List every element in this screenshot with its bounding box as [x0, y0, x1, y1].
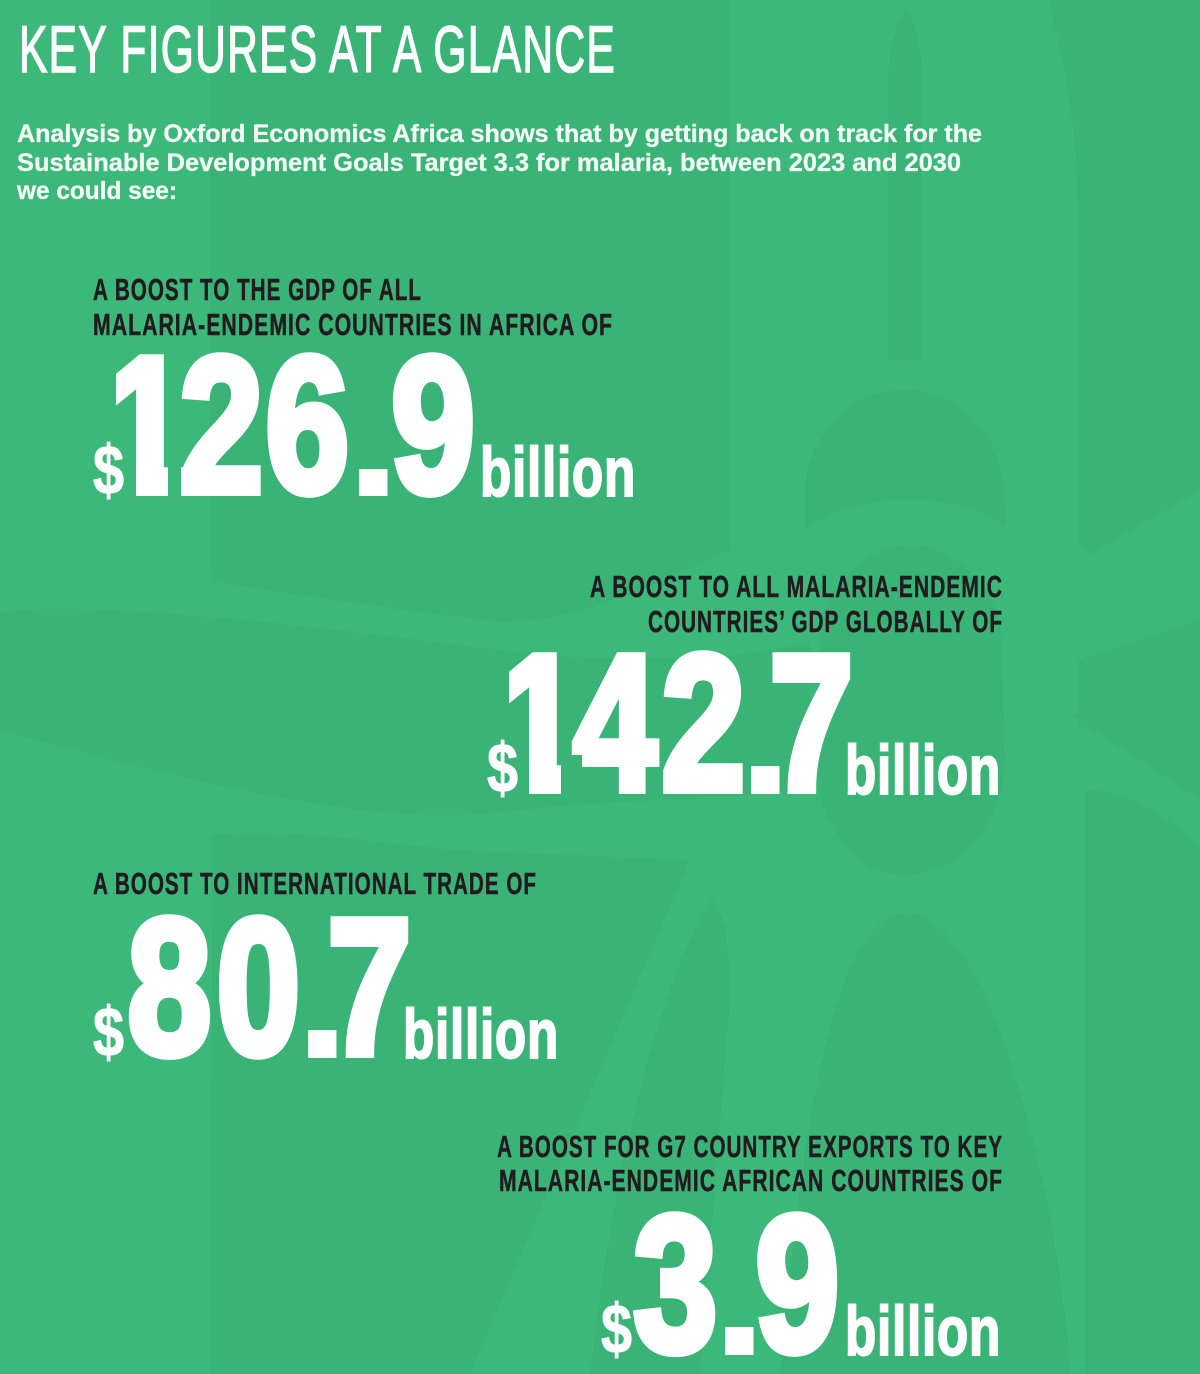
intro text: Analysis by Oxford Economics Africa shows that by getting back on track for the [17, 120, 982, 148]
intro text: Sustainable Development Goals Target 3.3 for malaria, between 2023 and 2030 [17, 149, 961, 177]
label: trade boost: A BOOST TO INTERNATIONAL TRADE OF [93, 866, 537, 901]
figure: $3.9 billion: $ [601, 1290, 632, 1368]
figure: $142.7 billion: billion [845, 731, 1001, 809]
figure: $126.9 billion: $ [93, 431, 124, 509]
figure: $80.7 billion [93, 914, 556, 1062]
figure: $126.9 billion [93, 352, 633, 500]
figure: $126.9 billion: billion [480, 433, 636, 511]
label: global GDP boost: A BOOST TO ALL MALARIA-ENDEMIC [590, 569, 1003, 604]
label: global GDP boost: COUNTRIES’ GDP GLOBALLY OF [648, 604, 1003, 639]
label: Africa GDP boost: A BOOST TO THE GDP OF ALL [93, 272, 422, 307]
label: Africa GDP boost: MALARIA-ENDEMIC COUNTRIES IN AFRICA OF [93, 307, 613, 342]
label: Africa GDP boost [93, 272, 613, 342]
panel: GDP of malaria-endemic countries in Africa [93, 278, 633, 500]
figure: $142.7 billion [487, 650, 998, 798]
title: KEY FIGURES AT A GLANCE [19, 12, 616, 86]
figure: $80.7 billion: billion [403, 995, 559, 1073]
label: G7 export boost [497, 1129, 1003, 1198]
intro text [16, 120, 982, 205]
intro text: we could see: [16, 177, 177, 205]
panel: G7 exports [497, 1129, 1003, 1374]
panel: global GDP of malaria-endemic countries [487, 576, 1002, 798]
panel: international trade [93, 872, 556, 1062]
figure: $126.9 billion: 126.9 [105, 316, 475, 533]
figure: $142.7 billion: $ [487, 729, 518, 807]
figure: $3.9 billion: billion [845, 1292, 1001, 1370]
figure: $80.7 billion: 80.7 [128, 878, 411, 1095]
figure: $3.9 billion [601, 1211, 998, 1358]
figure: $142.7 billion: 142.7 [497, 614, 853, 831]
figure: $80.7 billion: $ [93, 993, 124, 1071]
label: global GDP boost [590, 569, 1003, 639]
